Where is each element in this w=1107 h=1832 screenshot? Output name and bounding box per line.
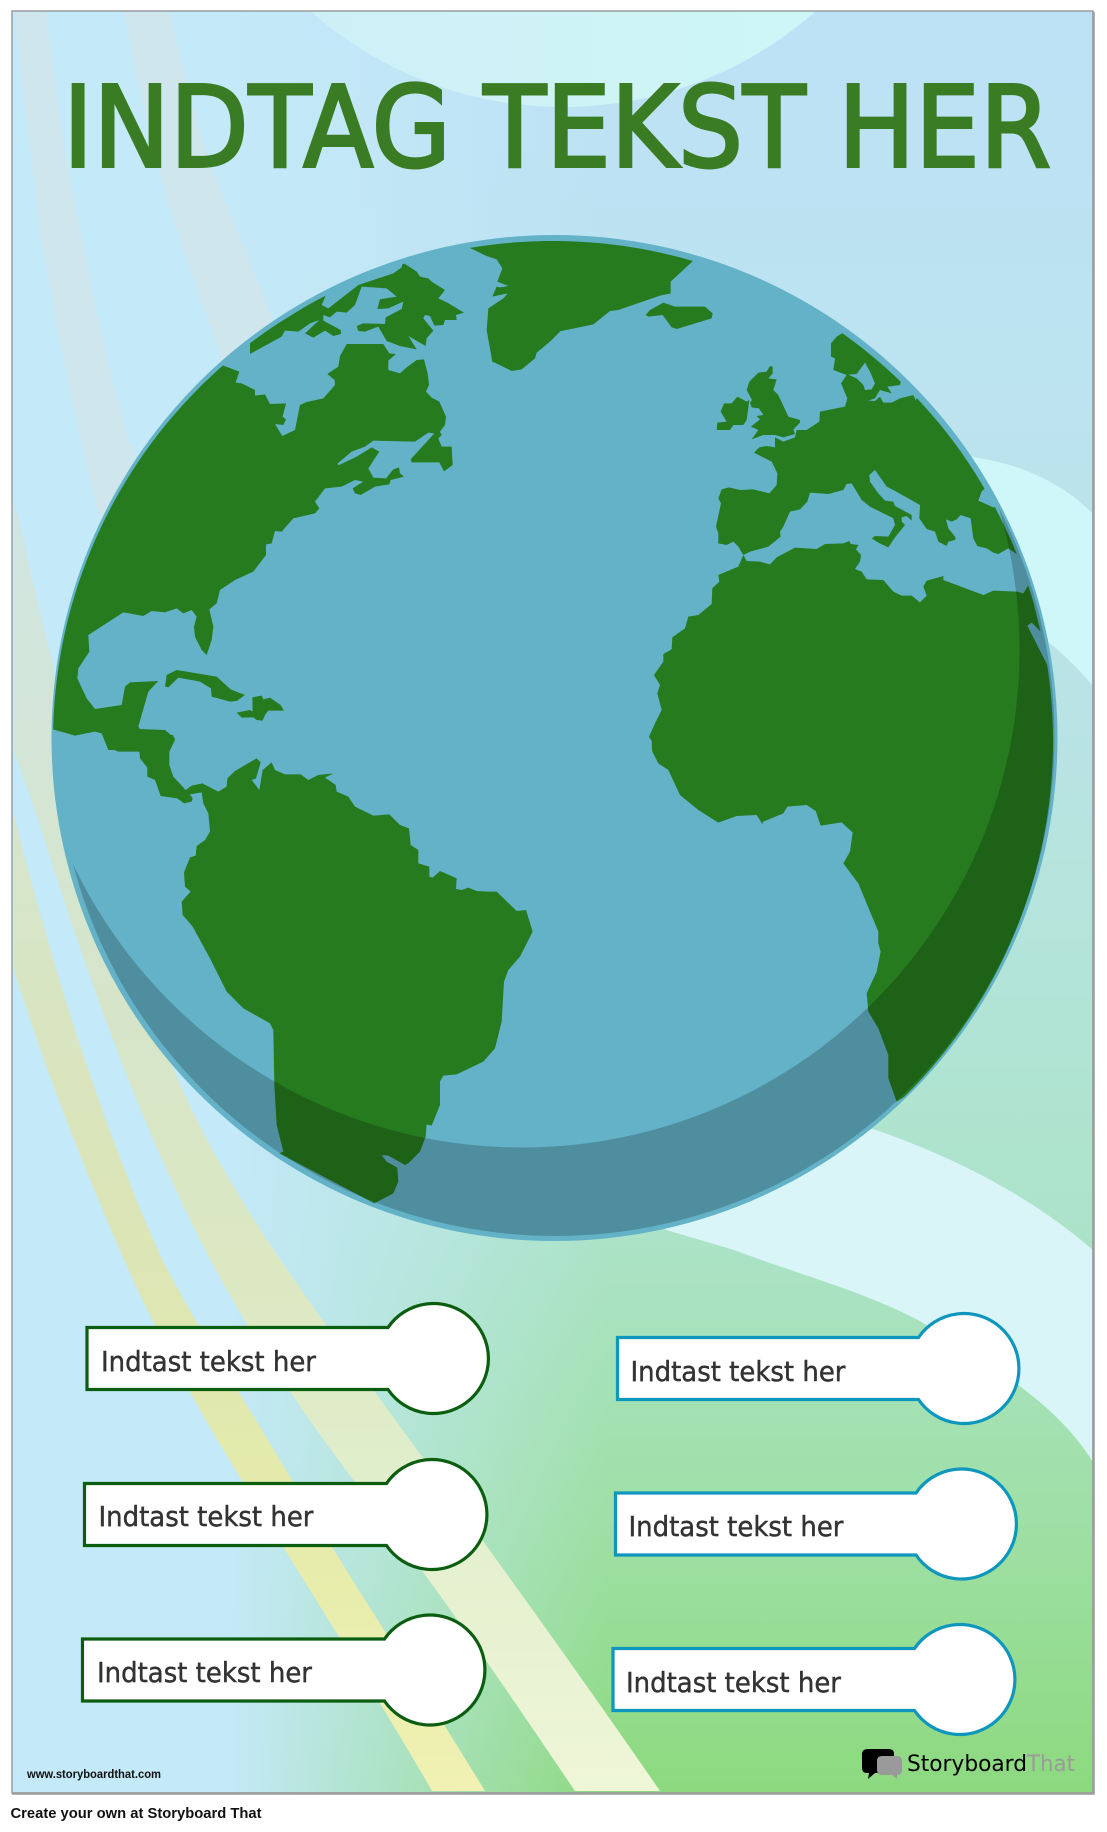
callout left 1: Indtast tekst her: [101, 1345, 316, 1378]
stripe two: [124, 12, 274, 360]
callout left 3: Indtast tekst her: [97, 1656, 312, 1689]
logo wordmark: Storyboard: [907, 1752, 1027, 1777]
ocean: [52, 235, 1058, 1241]
South Africa: [649, 735, 1083, 1102]
footer credit: Create your own at Storyboard That: [10, 1806, 262, 1822]
callout right 1: [618, 1313, 1019, 1423]
globe shadow crescent: [73, 508, 1054, 1236]
North Africa: [649, 541, 1070, 750]
logo: [862, 1749, 1075, 1779]
curved band A: [14, 815, 485, 1791]
callout left 2: [84, 1460, 487, 1569]
Europe: [716, 328, 1025, 560]
callout right 3: Indtast tekst her: [626, 1666, 841, 1699]
callout right 3: [613, 1624, 1015, 1734]
callout right 2: [616, 1469, 1016, 1579]
South and Central America: [103, 735, 533, 1203]
curved band B: [14, 500, 660, 1791]
Ireland: [717, 397, 749, 430]
callout left 2: Indtast tekst her: [98, 1500, 314, 1533]
icon: speech bubbles: [862, 1749, 902, 1779]
Great Britain: [747, 366, 800, 439]
globe: [40, 230, 1083, 1241]
top pale cap: [312, 12, 815, 107]
right pale patch: [972, 457, 1092, 684]
Canadian Arctic: [250, 262, 464, 354]
callout right 2: Indtast tekst her: [628, 1510, 844, 1543]
Baltic Sea: [848, 363, 875, 390]
Greenland east: [540, 241, 693, 332]
Iceland: [646, 303, 713, 329]
North America: [40, 344, 453, 750]
stripe one: [14, 12, 136, 520]
Greenland west: [470, 241, 560, 371]
callout left 3: [82, 1615, 485, 1725]
Hispaniola: [237, 696, 284, 721]
Cuba: [165, 670, 245, 702]
land masses: [40, 230, 1083, 1203]
callout left 1: [87, 1304, 488, 1413]
callout right 1: Indtast tekst her: [630, 1355, 846, 1388]
lower pale swoop: [664, 1128, 1092, 1461]
logo wordmark grey: That: [1026, 1752, 1075, 1777]
website url: www.storyboardthat.com: [26, 1769, 161, 1781]
